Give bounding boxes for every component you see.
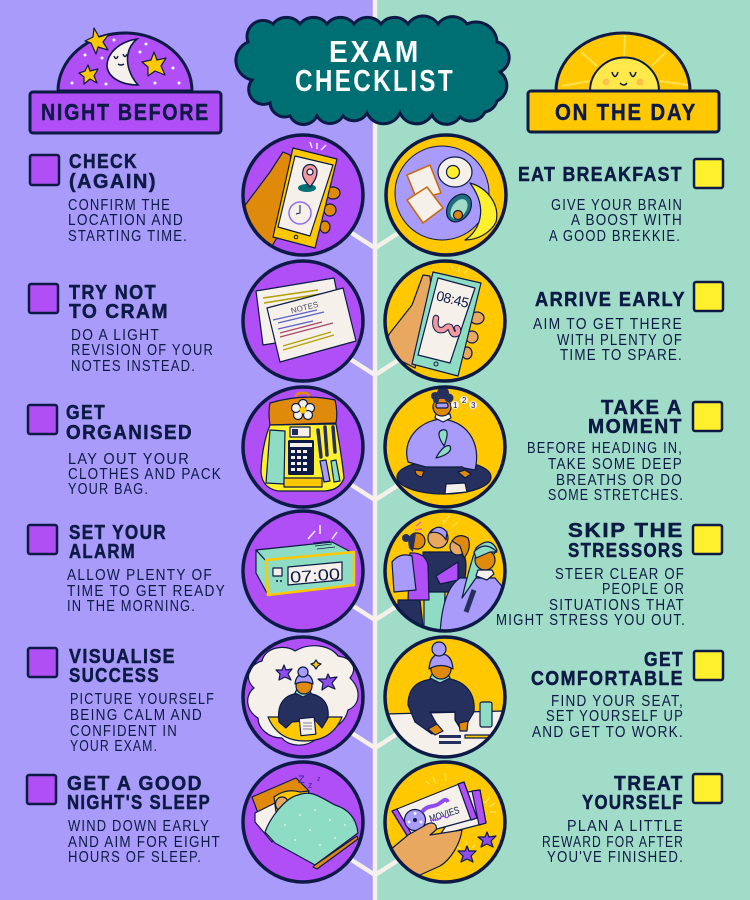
icon: movie tickets in hand [385, 762, 505, 882]
text: get organised: YOUR BAG. [68, 481, 149, 498]
text: set your alarm [67, 521, 226, 615]
icon: sleeping in bed [243, 762, 363, 882]
text: take a moment: MOMENT [588, 415, 683, 438]
text: arrive early [533, 288, 686, 364]
title: exam checklist cloud: EXAM [329, 34, 421, 69]
text: treat yourself: REWARD FOR AFTER [542, 834, 684, 851]
text: arrive early: AIM TO GET THERE [533, 316, 683, 333]
text: visualise success: YOUR EXAM. [70, 738, 158, 755]
text: take a moment: TAKE A [601, 396, 683, 419]
text: check (again): LOCATION AND [68, 212, 184, 229]
text: get organised: LAY OUT YOUR [68, 451, 190, 468]
text: check (again): (AGAIN) [69, 170, 157, 193]
title: exam checklist cloud [236, 16, 509, 124]
text: check (again): CONFIRM THE [68, 197, 171, 214]
text: try not to cram: TO CRAM [69, 300, 169, 323]
text: eat breakfast: EAT BREAKFAST [518, 163, 683, 186]
icon: sleeping in bed: z [317, 776, 321, 783]
text: skip the stressors [496, 519, 686, 629]
text: visualise success: BEING CALM AND [70, 707, 203, 724]
icon: sleeping in bed: z [308, 780, 313, 790]
text: arrive early: ARRIVE EARLY [535, 288, 686, 311]
text: visualise success [69, 645, 215, 755]
text: get a good night's sleep: WIND DOWN EARLY [68, 818, 210, 835]
text: get comfortable [531, 648, 684, 741]
badge: night before: NIGHT BEFORE [41, 99, 210, 125]
text: treat yourself: TREAT [614, 772, 684, 795]
text: eat breakfast: GIVE YOUR BRAIN [551, 197, 683, 214]
text: eat breakfast: A GOOD BREKKIE. [549, 228, 681, 245]
icon: phone showing 08:45 [380, 261, 505, 381]
icon: alarm clock 07:00 [243, 511, 363, 631]
text: visualise success: VISUALISE [69, 645, 176, 668]
icon: alarm clock 07:00: 07:00 [290, 566, 341, 587]
icon: person meditating: 3 [471, 401, 476, 410]
text: get comfortable: GET [644, 648, 684, 671]
badge: night before [30, 28, 221, 133]
icon: moon and stars dome [58, 28, 192, 91]
left checkboxes [27, 155, 59, 804]
text: get comfortable: COMFORTABLE [531, 667, 684, 690]
icon: breakfast plate [386, 135, 506, 255]
text: set your alarm: ALLOW PLENTY OF [67, 567, 213, 584]
text: set your alarm: TIME TO GET READY [67, 583, 226, 600]
icon: revision notes: NOTES [290, 300, 319, 315]
text: try not to cram: DO A LIGHT [71, 327, 160, 344]
text: treat yourself: PLAN A LITTLE [567, 818, 684, 835]
text: visualise success: SUCCESS [69, 664, 160, 687]
icon: stressed crowd [385, 511, 505, 635]
text: get a good night's sleep: AND AIM FOR EIGHT [68, 834, 221, 851]
text: get organised: GET [66, 401, 106, 424]
icon: phone showing 08:45: 08:45 [435, 287, 471, 311]
text: get organised [66, 401, 222, 498]
right checkboxes [693, 159, 723, 803]
text: take a moment: TAKE SOME DEEP [548, 456, 683, 473]
text: get a good night's sleep: HOURS OF SLEEP. [68, 849, 202, 866]
badge: on the day [528, 33, 719, 132]
icon: person seated at desk [384, 637, 510, 760]
text: skip the stressors: SKIP THE [568, 519, 684, 542]
icon: visualising success [243, 637, 363, 757]
text: get a good night's sleep: NIGHT'S SLEEP [67, 791, 211, 814]
text: get comfortable: SET YOURSELF UP [546, 708, 684, 725]
icon: person meditating: 2 [462, 396, 467, 405]
text: skip the stressors: SITUATIONS THAT [549, 597, 685, 614]
text: get comfortable: FIND YOUR SEAT, [551, 693, 684, 710]
text: treat yourself: YOURSELF [582, 791, 684, 814]
text: try not to cram: REVISION OF YOUR [71, 342, 214, 359]
text: treat yourself [542, 772, 684, 866]
text: visualise success: CONFIDENT IN [70, 723, 178, 740]
text: set your alarm: SET YOUR [69, 521, 167, 544]
text: eat breakfast [518, 163, 683, 245]
text: take a moment: BREATHS OR DO [556, 472, 683, 489]
text: skip the stressors: STRESSORS [568, 539, 684, 562]
text: visualise success: PICTURE YOURSELF [70, 691, 215, 708]
text: take a moment: SOME STRETCHES. [548, 487, 684, 504]
icon: sun dome [556, 33, 690, 91]
icon: person meditating: 1 [453, 401, 458, 410]
text: set your alarm: IN THE MORNING. [67, 598, 196, 615]
text: take a moment [527, 396, 684, 504]
text: skip the stressors: PEOPLE OR [602, 581, 685, 598]
icon: sleeping in bed: Z [298, 774, 305, 786]
text: eat breakfast: A BOOST WITH [571, 212, 683, 229]
text: check (again) [68, 150, 188, 245]
text: try not to cram: NOTES INSTEAD. [71, 358, 196, 375]
icon: phone with map pin in hand [240, 135, 363, 255]
icon: revision notes [243, 261, 363, 381]
text: get organised: ORGANISED [66, 421, 193, 444]
text: arrive early: WITH PLENTY OF [557, 332, 683, 349]
icon: person meditating [385, 387, 505, 507]
text: try not to cram [69, 281, 214, 375]
text: try not to cram: TRY NOT [69, 281, 157, 304]
text: check (again): STARTING TIME. [68, 228, 188, 245]
text: get organised: CLOTHES AND PACK [68, 466, 222, 483]
text: treat yourself: YOU'VE FINISHED. [547, 849, 684, 866]
text: arrive early: TIME TO SPARE. [560, 347, 683, 364]
title: exam checklist cloud: CHECKLIST [295, 63, 455, 98]
text: set your alarm: ALARM [69, 540, 136, 563]
icon: movie tickets in hand: MOVIES [428, 805, 461, 825]
text: get a good night's sleep: GET A GOOD [67, 772, 203, 795]
text: get a good night's sleep [67, 772, 221, 866]
text: check (again): CHECK [69, 150, 138, 173]
badge: on the day: ON THE DAY [555, 99, 697, 125]
text: get comfortable: AND GET TO WORK. [532, 724, 684, 741]
text: skip the stressors: STEER CLEAR OF [555, 566, 685, 583]
text: take a moment: BEFORE HEADING IN, [527, 440, 683, 457]
icon: packed backpack [243, 387, 363, 507]
text: skip the stressors: MIGHT STRESS YOU OUT. [496, 612, 686, 629]
